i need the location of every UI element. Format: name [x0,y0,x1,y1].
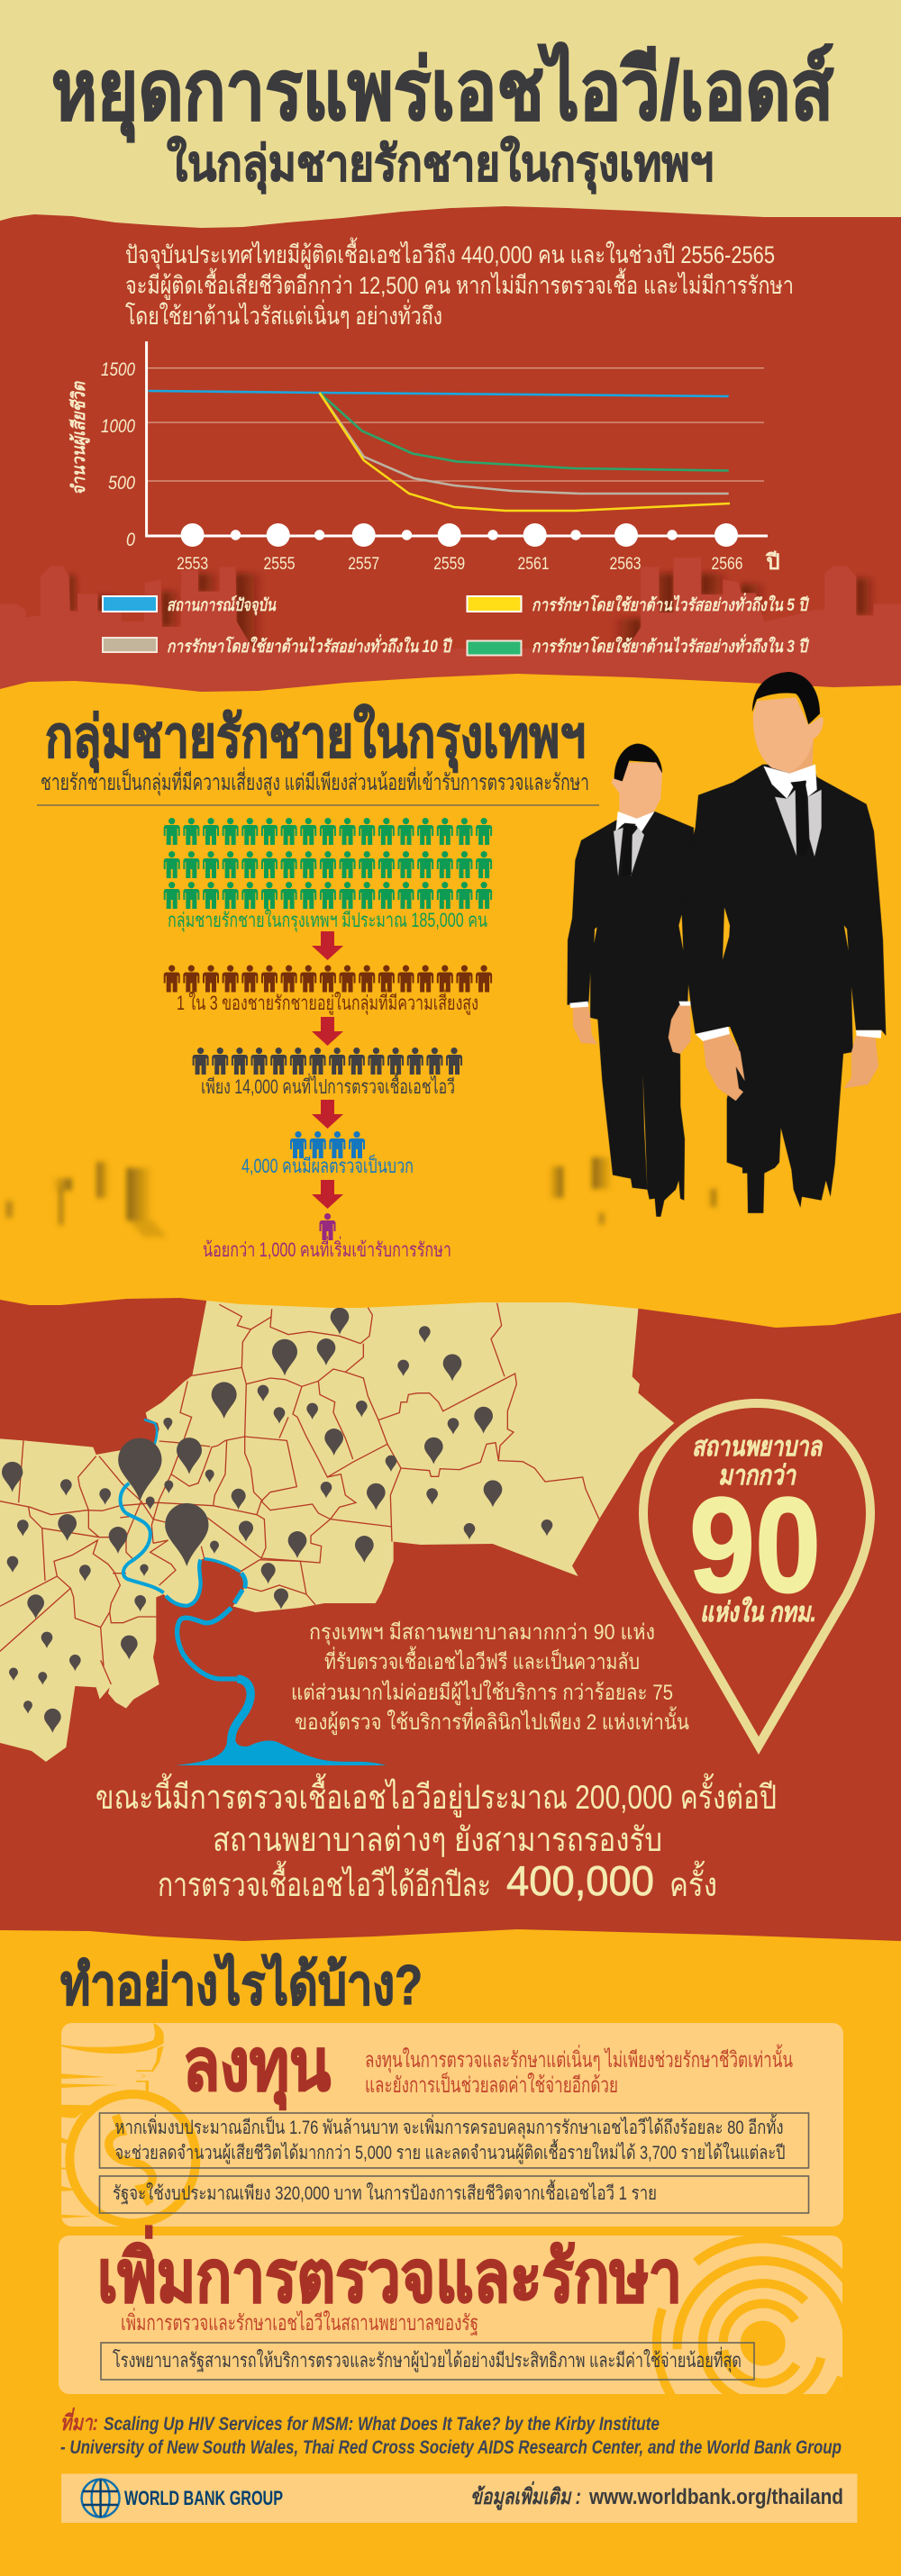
more info label: ข้อมูลเพิ่มเติม : [470,2481,581,2510]
invest description: และยังการเป็นช่วยลดค่าใช้จ่ายอีกด้วย [365,2072,618,2098]
testing capacity statement: สถานพยาบาลต่างๆ ยังสามารถรองรับ [213,1821,662,1858]
purple person [319,1213,335,1240]
year labels: 2553 [177,555,208,574]
callout: more than 90 hospitals pin [643,1403,870,1746]
arrow [312,1100,343,1129]
arrow [312,1180,343,1209]
front man [678,672,886,1213]
illustration: two men in suits [567,672,886,1217]
hospital pins [2,1308,552,1733]
chart legend: การรักษาโดยใช้ยาต้านไวรัสอย่างทั่วถึงใน 5 ปี [532,593,809,615]
intro paragraph: โดยใช้ยาต้านไวรัสแต่เนิ่นๆ อย่างทั่วถึง [125,299,442,330]
y axis labels: 1500 [101,359,135,380]
blue label: 4,000 คนมีผลตรวจเป็นบวก [241,1153,414,1177]
panel: MSM in Bangkok yellow section [0,674,901,1328]
series: 10 years [320,393,729,494]
brown label: 1 ใน 3 ของชายรักชายอยู่ในกลุ่มที่มีความเสี่ยงสูง [177,989,478,1015]
source note: Scaling Up HIV Services for MSM: What Does It Take? by the Kirby Institute [104,2414,660,2435]
green label: กลุ่มชายรักชายในกรุงเทพฯ มีประมาณ 185,000 คน [168,909,487,932]
y axis labels: 0 [126,530,135,550]
heading: increase testing: เพิ่มการตรวจและรักษา [97,2226,682,2317]
dark people row [193,1048,462,1075]
callout: more than 90 hospitals pin: สถานพยาบาล [692,1432,823,1462]
city skyline behind legend [0,558,901,694]
panel: increase testing and treatment [59,2226,853,2404]
footer bar [61,2473,858,2523]
heading: invest: ลงทุน [183,2025,331,2110]
series: 5 years [320,393,730,511]
chart legend: สถานการณ์ปัจจุบัน [167,594,277,616]
year labels: 2563 [609,555,642,574]
chart legend [103,593,809,657]
map description text: กรุงเทพฯ มีสถานพยาบาลมากกว่า 90 แห่ง [309,1620,655,1646]
y axis title: จำนวนผู้เสียชีวิต [68,380,90,495]
year labels: 2559 [433,555,465,574]
green people rows [164,818,492,909]
year labels: 2557 [348,555,379,574]
box: cost per life [99,2176,809,2213]
y axis labels: 1000 [101,416,135,437]
panel: invest [54,2023,843,2227]
map description text: ของผู้ตรวจ ใช้บริการที่คลินิกไปเพียง 2 แห่งเท่านั้น [295,1706,689,1736]
testing capacity statement: การตรวจเชื้อเอชไอวีได้อีกปีละ [158,1860,491,1903]
blue people row [290,1131,365,1158]
y axis labels [101,359,135,550]
invest description [365,2044,793,2098]
subheading: ชายรักชายเป็นกลุ่มที่มีความเสี่ยงสูง แต่มีเพียงส่วนน้อยที่เข้ารับการตรวจและรักษา [41,766,589,796]
heading: ทำอย่างไรได้บ้าง? [60,1953,423,2017]
increase testing description: เพิ่มการตรวจและรักษาเอชไอวีในสถานพยาบาลของรัฐ [121,2308,478,2336]
bangkok map [0,1297,674,1765]
series: 3 years [320,393,729,470]
line chart: deaths per year [68,341,780,575]
year labels: 2555 [263,555,296,574]
heading: กลุ่มชายรักชายในกรุงเทพฯ [45,703,586,773]
back man [567,744,694,1217]
map description text: ที่รับตรวจเชื้อเอชไอวีฟรี และเป็นความลับ [324,1646,640,1674]
website url: www.worldbank.org/thailand [588,2485,843,2509]
skyline shadows [5,1157,716,1237]
testing capacity statement [96,1773,777,1904]
brown people row [164,966,492,993]
series: current situation [148,391,729,396]
arrow [312,931,343,960]
box: cost per life: รัฐจะใช้งบประมาณเพียง 320,000 บาท ในการป้องการเสียชีวิตจากเชื้อเอชไอวี 1 ราย [113,2180,657,2204]
year labels [177,550,780,575]
year labels: ปี [765,550,780,575]
river [121,1420,250,1747]
year labels: 2566 [712,555,742,574]
icon: coin stack [54,2023,196,2223]
gridlines [146,368,764,481]
callout: more than 90 hospitals pin: 90 [689,1469,821,1620]
box: public hospitals [101,2343,754,2380]
chart legend: การรักษาโดยใช้ยาต้านไวรัสอย่างทั่วถึงใน 10 ปี [167,634,452,657]
river delta [175,1741,387,1765]
callout: more than 90 hospitals pin: มากกว่า [718,1461,796,1491]
header band [0,0,901,228]
district borders [0,1303,599,1684]
callout: more than 90 hospitals pin: แห่งใน กทม. [700,1596,816,1628]
arrow [312,1017,343,1046]
icon: world bank globe [82,2480,120,2517]
world bank group wordmark: WORLD BANK GROUP [124,2487,283,2509]
axes [147,341,768,536]
map description text [291,1620,689,1736]
chart legend: การรักษาโดยใช้ยาต้านไวรัสอย่างทั่วถึงใน 3 ปี [532,634,809,657]
subtitle: ในกลุ่มชายรักชายในกรุงเทพฯ [167,135,714,195]
panel: what can be done yellow section [0,1929,901,2576]
dark label: เพียง 14,000 คนที่ไปการตรวจเชื้อเอชไอวี [201,1073,455,1098]
intro paragraph [125,237,794,330]
timeline dots [181,523,738,547]
box: budget benefit [99,2113,809,2168]
icon: target rings [657,2239,853,2404]
map description text: แต่ส่วนมากไม่ค่อยมีผู้ไปใช้บริการ กว่าร้อยละ 75 [291,1680,673,1706]
source note: ที่มา: [60,2407,98,2435]
source note [60,2407,842,2458]
testing capacity statement: ครั้ง [669,1860,717,1903]
year labels: 2561 [517,555,550,574]
testing capacity statement: 400,000 [506,1857,654,1904]
map land [0,1297,674,1762]
purple label: น้อยกว่า 1,000 คนที่เริ่มเข้ารับการรักษา [203,1236,451,1261]
y axis labels: 500 [108,473,135,494]
